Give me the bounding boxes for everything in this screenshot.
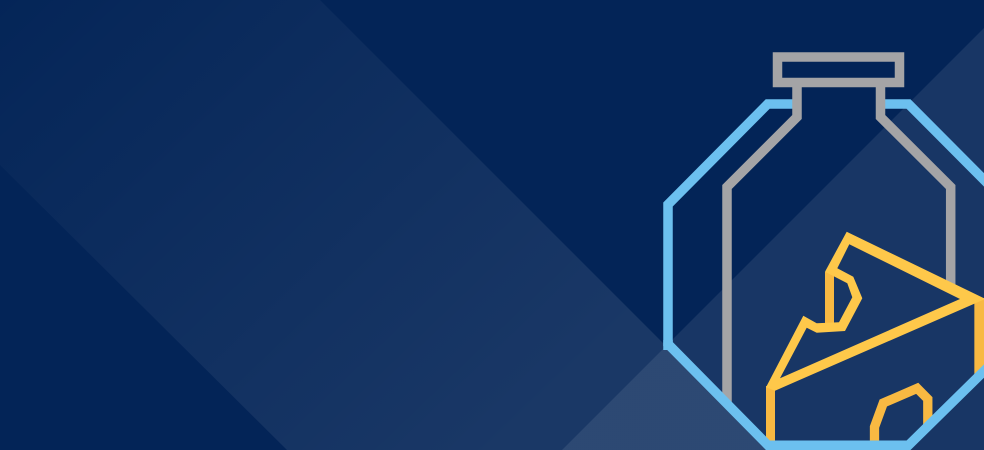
- bottle body left side: [727, 87, 797, 404]
- diagonal light band descending to the right: [0, 0, 770, 450]
- cheese right edge: [974, 298, 984, 377]
- icon: bottle: [727, 57, 951, 404]
- diagonal light band rising to the right: [562, 28, 984, 450]
- cheese bite inner edge: [825, 272, 834, 324]
- octagon upper outline: [668, 104, 984, 350]
- cheese top face: [766, 232, 984, 391]
- icon: cheese wedge: [766, 232, 984, 446]
- cheese hole: [874, 388, 928, 446]
- octagon lower outline: [668, 340, 984, 445]
- bottle cap: [778, 57, 900, 82]
- bottle neck interior: [801, 87, 876, 111]
- bottle body right side: [880, 87, 951, 290]
- cheese left edge: [766, 386, 775, 446]
